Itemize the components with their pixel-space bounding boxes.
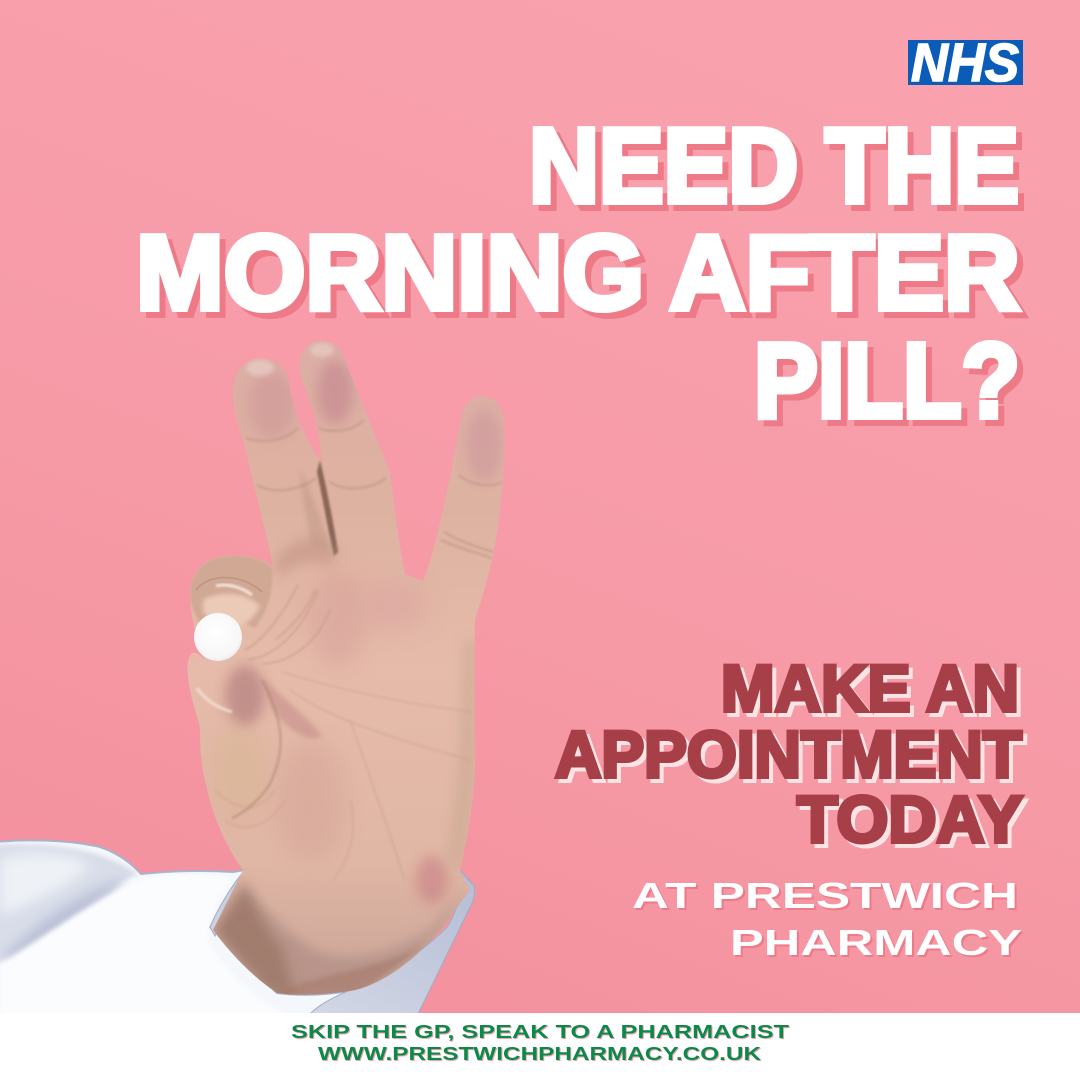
wrist shadow [213, 882, 456, 990]
footer line: website: WWW.PRESTWICHPHARMACY.CO.UK [319, 1045, 762, 1065]
footer text: tagline and website [291, 1022, 790, 1065]
location line: pharmacy: PHARMACY [732, 924, 1024, 965]
heading line: pill: PILL? [754, 322, 1020, 440]
thumb [225, 665, 265, 725]
cta line: appointment: APPOINTMENT [559, 721, 1026, 795]
curled index finger [190, 556, 272, 628]
location line: at prestwich: AT PRESTWICH [634, 877, 1020, 918]
right hand edge shading [449, 642, 475, 864]
heading line: need the: NEED THE [529, 107, 1019, 225]
NHS logo: NHS [911, 33, 1019, 93]
heading: need the morning after pill [136, 107, 1026, 446]
location line: pharmacy: PHARMACY [730, 922, 1022, 963]
shirt sleeve [0, 839, 346, 1013]
footer line: tagline: SKIP THE GP, SPEAK TO A PHARMACIST [291, 1022, 789, 1042]
gap between fingers [317, 460, 338, 556]
location line: pharmacy [730, 922, 1024, 965]
cta line: today: TODAY [797, 782, 1023, 856]
palm creases [288, 674, 444, 750]
location line: at prestwich: AT PRESTWICH [632, 875, 1018, 916]
hand [188, 341, 504, 1000]
cta line: make an: MAKE AN [721, 651, 1019, 725]
location line: at prestwich [632, 875, 1020, 918]
footer line: tagline: SKIP THE GP, SPEAK TO A PHARMACIST [292, 1023, 790, 1043]
white footer band [0, 1013, 1080, 1080]
thumb base creases [245, 585, 330, 664]
icon: white pill [194, 613, 242, 661]
footer line: tagline [291, 1022, 790, 1043]
photo: hand holding a pill in a white sleeve [0, 341, 504, 1016]
heading line: morning after: MORNING AFTER [136, 214, 1020, 332]
palm flush [312, 577, 364, 664]
cta line: appointment: APPOINTMENT [555, 717, 1022, 791]
location text: at prestwich pharmacy [632, 875, 1024, 965]
footer line: website: WWW.PRESTWICHPHARMACY.CO.UK [318, 1044, 761, 1064]
heading line: need the: NEED THE [535, 113, 1025, 231]
finger creases [246, 420, 502, 558]
heading line: morning after: MORNING AFTER [142, 220, 1026, 338]
call to action: make an appointment today [555, 651, 1027, 860]
cta line: make an: MAKE AN [725, 655, 1023, 729]
cta line: today: TODAY [801, 786, 1027, 860]
fingertip flush [248, 371, 296, 439]
shirt cuff [210, 870, 475, 1016]
heading line: pill: PILL? [760, 328, 1026, 446]
